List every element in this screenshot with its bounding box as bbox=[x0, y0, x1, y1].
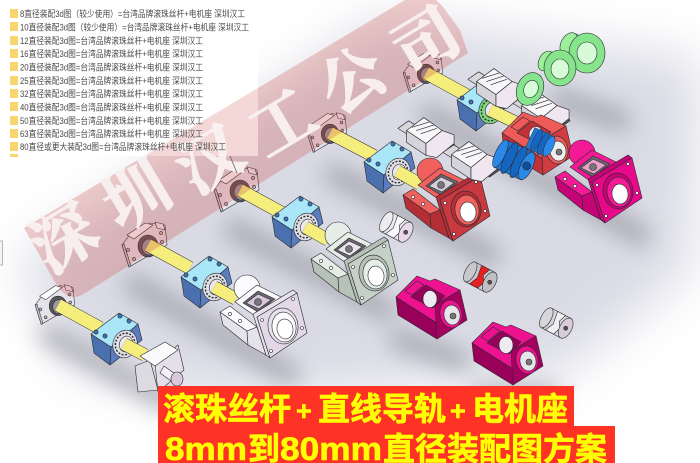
watermark text bbox=[19, 0, 473, 286]
grey coupling bbox=[537, 306, 576, 341]
magenta motor seat, upper right bbox=[555, 140, 642, 223]
linear guide blocks bbox=[398, 69, 570, 182]
file names: 50直径装配3d图=台湾品牌滚珠丝杆+电机座 深圳汉工 bbox=[20, 115, 203, 126]
title banner: + bbox=[450, 396, 466, 426]
file list panel bbox=[3, 0, 258, 157]
title banner bbox=[158, 386, 615, 463]
watermark text: 汉 bbox=[164, 114, 256, 207]
assembly 5: top ball screw with green bearing bbox=[403, 53, 515, 131]
assembly 4: red motor seat bbox=[307, 113, 490, 241]
file names: 63直径装配3d图=台湾品牌滚珠丝杆+电机座 深圳汉工 bbox=[20, 128, 203, 139]
file names: 8直径装配3d图（较少使用）=台湾品牌滚珠丝杆+电机座 深圳汉工 bbox=[20, 8, 245, 19]
assembly 2: white motor seat bbox=[122, 222, 307, 358]
watermark text: 公 bbox=[307, 34, 399, 127]
watermark text: 深 bbox=[19, 193, 111, 286]
dark magenta motor seat, left bbox=[396, 276, 467, 339]
assembly 3: grey motor seat bbox=[214, 167, 398, 305]
title banner: 电机座 bbox=[472, 391, 568, 427]
dark magenta motor seat, right bbox=[472, 322, 543, 385]
file names: 25直径装配3d图=台湾品牌滚珠丝杆+电机座 深圳汉工 bbox=[20, 75, 203, 86]
pointer line to end block bbox=[230, 156, 237, 173]
watermark text: 工 bbox=[237, 77, 329, 170]
folder icons bbox=[10, 9, 18, 157]
title banner: 滚珠丝杆 bbox=[163, 391, 291, 427]
file names bbox=[20, 8, 249, 152]
blue couplings bbox=[489, 126, 558, 184]
watermark text: 圳 bbox=[91, 150, 183, 243]
left edge tab bbox=[0, 241, 2, 265]
file names: 20直径装配3d图=台湾品牌滚珠丝杆+电机座 深圳汉工 bbox=[20, 62, 203, 72]
title banner: 直线导轨 bbox=[318, 391, 446, 427]
green flange bearings bbox=[511, 30, 605, 110]
red coupling bbox=[461, 260, 500, 295]
file names: 16直径装配3d图=台湾品牌滚珠丝杆+电机座 深圳汉工 bbox=[20, 48, 203, 59]
title banner: + bbox=[296, 396, 312, 426]
assembly 1: 8-10 mm ball screw bbox=[35, 285, 184, 392]
file names: 10直径装配3d图（较少使用）=台湾品牌滚珠丝杆+电机座 深圳汉工 bbox=[20, 22, 249, 32]
file names: 12直径装配3d图=台湾品牌滚珠丝杆+电机座 深圳汉工 bbox=[20, 35, 203, 46]
red box motor seat bbox=[502, 112, 573, 175]
watermark band bbox=[24, 0, 468, 297]
white coupling bbox=[377, 210, 416, 245]
soft shadows under the assemblies bbox=[50, 100, 640, 400]
file names: 32直径装配3d图=台湾品牌滚珠丝杆+电机座 深圳汉工 bbox=[20, 88, 203, 99]
file names: 40直径装配3d图=台湾品牌滚珠丝杆+电机座 深圳汉工 bbox=[20, 102, 203, 112]
file names: 80直径或更大装配3d图=台湾品牌滚珠丝杆+电机座 深圳汉工 bbox=[20, 141, 226, 152]
